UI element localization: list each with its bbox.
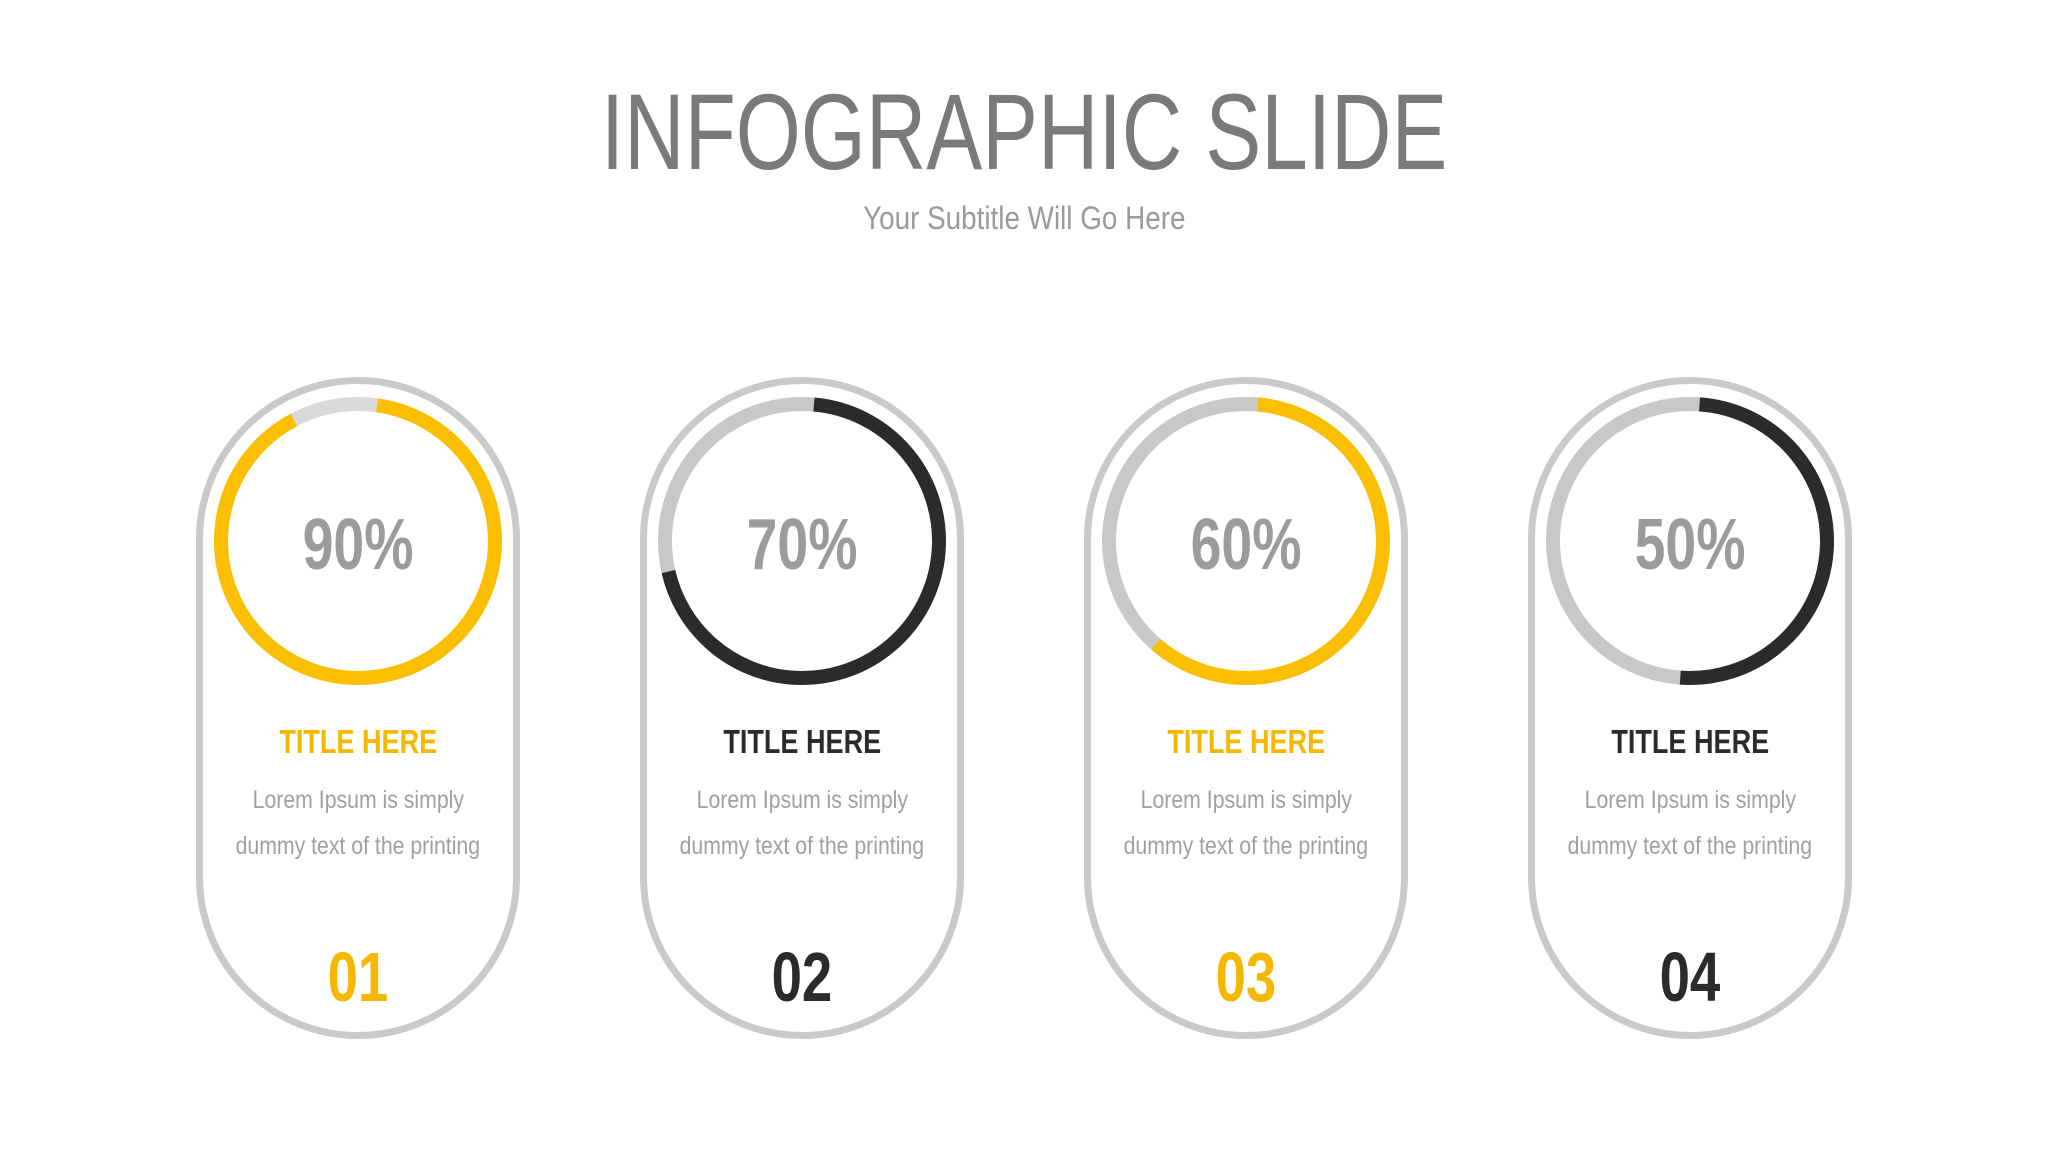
panel: 02: [640, 377, 964, 1039]
description: dummy text of the printing: [1124, 832, 1368, 860]
description: Lorem Ipsum is simply: [1140, 786, 1352, 814]
description: dummy text of the printing: [680, 832, 924, 860]
card title: TITLE HERE: [723, 723, 881, 760]
percentage: 90%: [303, 505, 413, 585]
description: Lorem Ipsum is simply: [1584, 786, 1796, 814]
ring chart 60%: [1102, 397, 1390, 685]
description: [1568, 786, 1812, 860]
description: Lorem Ipsum is simply: [696, 786, 908, 814]
ring chart 50%: [1546, 397, 1834, 685]
card title: TITLE HERE: [1167, 723, 1325, 760]
number: 01: [328, 938, 388, 1016]
description: [680, 786, 924, 860]
ring chart 70%: [658, 397, 946, 685]
title: INFOGRAPHIC SLIDE: [601, 71, 1447, 192]
subtitle: Your Subtitle Will Go Here: [863, 200, 1185, 236]
description: Lorem Ipsum is simply: [252, 786, 464, 814]
panel: 01: [196, 377, 520, 1039]
description: dummy text of the printing: [1568, 832, 1812, 860]
panel: 03: [1084, 377, 1408, 1039]
number: 03: [1216, 938, 1276, 1016]
card title: TITLE HERE: [1611, 723, 1769, 760]
ring chart 90%: [214, 397, 502, 685]
description: dummy text of the printing: [236, 832, 480, 860]
card title: TITLE HERE: [279, 723, 437, 760]
percentage: 70%: [747, 505, 857, 585]
percentage: 50%: [1635, 505, 1745, 585]
number: 04: [1660, 938, 1720, 1016]
description: [1124, 786, 1368, 860]
percentage: 60%: [1191, 505, 1301, 585]
description: [236, 786, 480, 860]
number: 02: [772, 938, 832, 1016]
panel: 04: [1528, 377, 1852, 1039]
